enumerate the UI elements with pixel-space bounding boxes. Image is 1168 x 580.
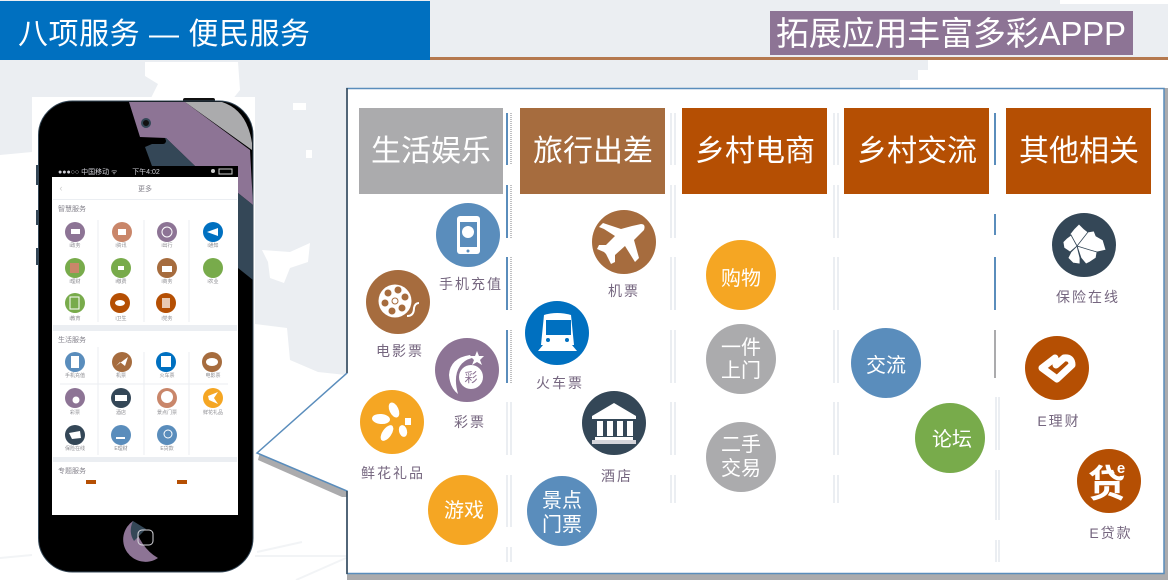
header bar [0, 1, 430, 60]
phone icon grid: 酒店 [116, 409, 126, 416]
circle: 景点门票 [527, 476, 597, 546]
circle: 购物: 购物 [721, 267, 761, 290]
phone icon grid: i政务 [69, 242, 81, 249]
phone screen: ‹ [60, 183, 62, 193]
icon: E贷款: E贷款 [1089, 525, 1133, 541]
phone icon grid: i出行 [161, 242, 173, 249]
circle: 一件上门: 上门 [721, 359, 761, 382]
phone icon grid [65, 222, 223, 452]
phone icon grid: i农业 [207, 278, 219, 285]
column header: 其他相关 [1006, 108, 1151, 194]
column header: 旅行出差 [520, 108, 665, 194]
column header: 生活娱乐 [359, 108, 503, 194]
icon: 火车票 [525, 301, 589, 391]
icon: 鲜花礼品: 鲜花礼品 [361, 465, 425, 481]
circle: 论坛 [915, 403, 985, 473]
phone icon grid: 彩票 [70, 409, 80, 416]
phone icon grid: E贷款 [160, 445, 174, 452]
phone icon grid: 景点门票 [157, 409, 177, 416]
icon: 保险在线: 保险在线 [1056, 289, 1120, 305]
circle: 一件上门 [706, 324, 776, 394]
column header: 旅行出差: 旅行出差 [533, 135, 653, 168]
phone icon grid: 机票 [116, 372, 126, 379]
callout panel [257, 88, 1168, 580]
phone icon grid: i教育 [69, 315, 81, 322]
phone icon grid: 电影票 [205, 372, 221, 379]
circle: 交流 [851, 328, 921, 398]
icon: 彩票: 彩 [464, 370, 478, 385]
icon: 手机充值: 手机充值 [439, 276, 503, 292]
title: 八项服务 — 便民服务 [18, 18, 310, 51]
icon: 机票 [592, 210, 656, 299]
icon: 鲜花礼品 [360, 390, 425, 481]
circle: 购物 [706, 240, 776, 310]
phone icon grid: i卫生 [115, 315, 127, 322]
phone icon grid: i商务 [161, 278, 173, 285]
phone icon grid: i通知 [207, 242, 219, 249]
circle: 一件上门: 一件 [721, 336, 761, 359]
circle: 二手交易: 二手 [721, 433, 761, 456]
icon: 彩票 [435, 338, 499, 430]
icon: E贷款: 贷 [1088, 464, 1126, 506]
phone screen [52, 166, 238, 515]
icon: 酒店: 酒店 [601, 468, 633, 484]
icon: 火车票: 火车票 [536, 375, 584, 391]
column header: 乡村交流: 乡村交流 [857, 135, 977, 168]
circle: 二手交易: 交易 [721, 457, 761, 480]
phone screen: 更多 [138, 184, 152, 193]
column header: 乡村电商 [682, 108, 827, 194]
phone icon grid: i缴费 [115, 278, 127, 285]
phone icon grid: 保险在线 [65, 445, 85, 452]
column separators [507, 113, 999, 562]
subtitle tag: 拓展应用丰富多彩APPP [776, 15, 1126, 52]
icon: 彩票: 彩票 [454, 414, 486, 430]
icon: 电影票: 电影票 [376, 343, 424, 359]
circle: 游戏 [428, 475, 498, 545]
phone icon grid: i党务 [161, 315, 173, 322]
phone icon grid: i理财 [69, 278, 81, 285]
phone icon grid: i资讯 [115, 242, 127, 249]
icon: E贷款 [1077, 449, 1141, 541]
circle: 景点门票: 景点 [542, 489, 582, 512]
phone screen: 专题服务 [58, 466, 86, 475]
icon: E贷款: e [1117, 460, 1125, 477]
icon: E理财: E理财 [1037, 413, 1081, 429]
column header: 乡村交流 [844, 108, 989, 194]
phone screen: 生活服务 [58, 335, 86, 344]
circle: 交流: 交流 [866, 354, 906, 377]
circle: 景点门票: 门票 [542, 513, 582, 536]
column header: 生活娱乐: 生活娱乐 [371, 135, 491, 168]
column header: 其他相关: 其他相关 [1019, 135, 1139, 168]
icon: 保险在线 [1052, 213, 1120, 305]
circle: 论坛: 论坛 [932, 428, 972, 451]
phone icon grid: 手机充值 [65, 372, 85, 379]
phone icon grid: E理财 [114, 445, 128, 452]
icon: E理财 [1025, 336, 1089, 429]
icon: 电影票 [366, 270, 430, 359]
column header: 乡村电商: 乡村电商 [695, 135, 815, 168]
circle: 二手交易 [706, 422, 776, 492]
icon: 酒店 [582, 391, 646, 484]
phone screen: ●●●○○ 中国移动 ᯤ [58, 167, 118, 176]
icon: 手机充值 [436, 203, 503, 292]
circle: 游戏: 游戏 [444, 499, 484, 522]
home button [123, 521, 158, 562]
phone screen: 智慧服务 [58, 204, 86, 213]
phone [36, 98, 253, 572]
phone icon grid: 火车票 [159, 372, 175, 379]
phone icon grid: 鲜花礼品 [203, 409, 223, 416]
icon: 机票: 机票 [608, 283, 640, 299]
phone screen: 下午4:02 [132, 167, 160, 176]
